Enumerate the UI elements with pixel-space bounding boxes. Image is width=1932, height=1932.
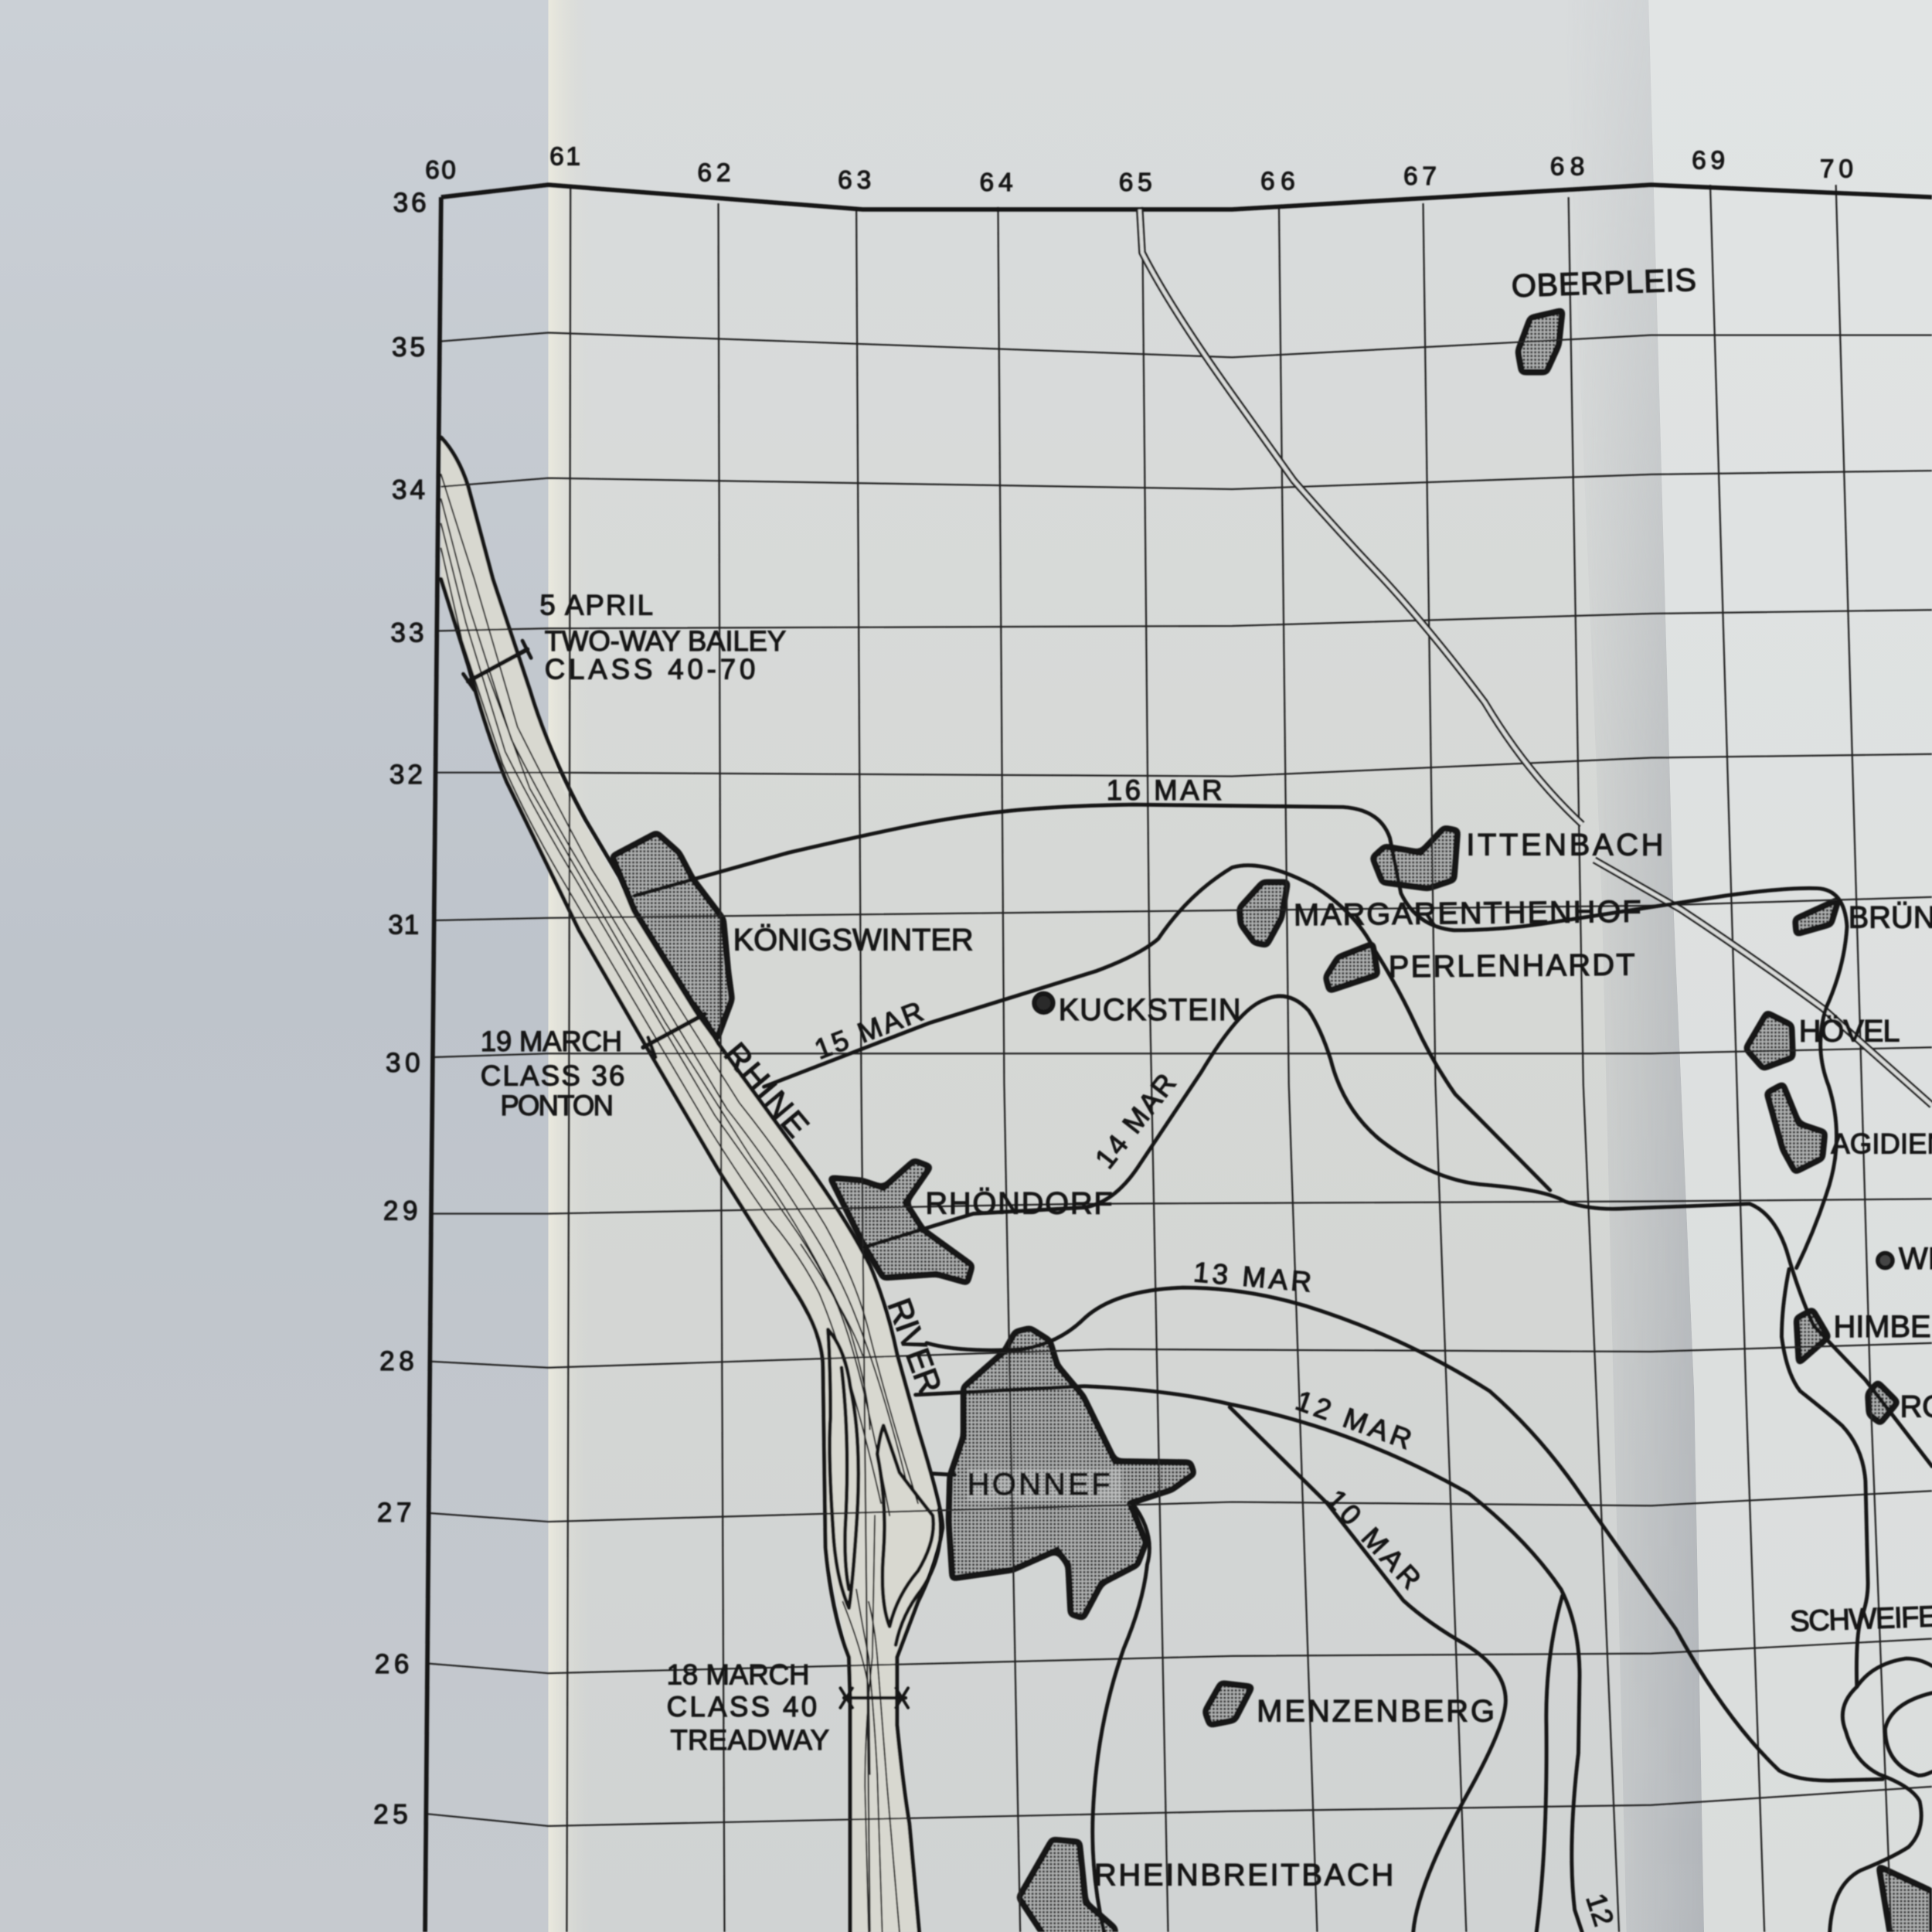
- town: Rheinbreitbach: [1019, 1839, 1115, 1932]
- place names: HONNEF: [968, 1468, 1111, 1502]
- route date labels: 15 MAR: [810, 995, 927, 1066]
- place names: HIMBE: [1833, 1310, 1931, 1344]
- row grid numbers: 32: [389, 760, 423, 790]
- bridge caption: 19 March: [481, 1026, 624, 1121]
- route date labels: [810, 774, 1620, 1930]
- town: Königswinter: [612, 833, 732, 1039]
- map grid: [425, 185, 1932, 1932]
- column grid numbers: 60: [425, 156, 456, 185]
- route: 14 March: [865, 996, 1932, 1466]
- place names: RHEINBREITBACH: [1094, 1858, 1393, 1892]
- bridge: 19 March ponton: [643, 1004, 709, 1057]
- route date labels: 16 MAR: [1107, 774, 1223, 806]
- town: Margarenthenhof: [1240, 883, 1287, 945]
- route: Honnef spur: [933, 1474, 955, 1475]
- river name labels: RIVER: [880, 1294, 948, 1399]
- route date labels: 12: [1580, 1889, 1620, 1930]
- route: 14 March southern branch: [1781, 1269, 1921, 1932]
- town: Rhöndorf: [831, 1161, 972, 1283]
- row grid numbers: 36: [393, 188, 427, 218]
- bridge caption: 18 March: 18 MARCH: [667, 1659, 810, 1691]
- route: 12 March: [916, 1386, 1582, 1932]
- advance routes: [634, 804, 1932, 1932]
- row grid numbers: 28: [379, 1346, 414, 1376]
- column grid numbers: 68: [1550, 152, 1584, 181]
- bridge caption: 18 March: CLASS 40: [667, 1691, 817, 1723]
- town: Ittenbach: [1372, 828, 1458, 889]
- double-line road: [1140, 209, 1932, 1105]
- column grid numbers: 63: [838, 166, 871, 195]
- bridge caption: 19 March: CLASS 36: [481, 1060, 624, 1092]
- town: Oberpleis: [1518, 311, 1563, 372]
- river name labels: [716, 1036, 948, 1399]
- bridge caption: 18 March: TREADWAY: [670, 1724, 829, 1756]
- river body fill: [441, 437, 943, 1932]
- route date labels: 14 MAR: [1089, 1067, 1182, 1175]
- row grid numbers: 27: [377, 1498, 412, 1528]
- bridge caption: 19 March: PONTON: [500, 1090, 614, 1121]
- column grid numbers: [425, 143, 1853, 197]
- column grid numbers: 62: [697, 158, 730, 187]
- town dot: Kuckstein: [1034, 994, 1053, 1012]
- route: 10 March: [1230, 1407, 1505, 1932]
- town: Rostingen: [1868, 1383, 1897, 1423]
- column grid numbers: 61: [549, 143, 580, 172]
- map border: north and west edges: [425, 185, 1932, 1932]
- town: Honnef: [949, 1328, 1194, 1617]
- town: Brüning: [1795, 900, 1838, 934]
- row grid numbers: 31: [388, 910, 419, 940]
- river thin current lines: [441, 474, 918, 1932]
- route: 16 March: [634, 804, 1847, 1268]
- row grid numbers: 35: [392, 332, 425, 362]
- route date labels: 13 MAR: [1192, 1256, 1313, 1298]
- column grid numbers: 69: [1692, 146, 1725, 175]
- bridge caption: 18 March: [667, 1659, 829, 1756]
- town: south-east village: [1879, 1866, 1932, 1932]
- row grid numbers: 33: [390, 618, 423, 648]
- route: 12 March branch: [1536, 1596, 1563, 1932]
- column grid numbers: 65: [1119, 168, 1152, 197]
- bridge caption: 5 April: CLASS 40-70: [545, 654, 755, 685]
- town: Ägidienberg: [1767, 1084, 1825, 1172]
- place names: HÖVEL: [1799, 1014, 1900, 1048]
- town: Menzenberg: [1205, 1683, 1252, 1725]
- route date labels: 12 MAR: [1291, 1384, 1416, 1455]
- column grid numbers: 70: [1820, 155, 1853, 184]
- row grid numbers: 29: [383, 1196, 417, 1226]
- bridge: 18 March treadway: [840, 1688, 908, 1708]
- place names: KÖNIGSWINTER: [733, 923, 974, 957]
- column grid numbers: 64: [980, 168, 1013, 197]
- place names: MENZENBERG: [1257, 1694, 1495, 1728]
- place names: KUCKSTEIN: [1059, 993, 1241, 1027]
- bridge caption: 19 March: 19 MARCH: [481, 1026, 622, 1057]
- row grid numbers: 30: [386, 1048, 420, 1078]
- row grid numbers: 34: [392, 475, 425, 505]
- route: 15 March: [764, 866, 1550, 1190]
- column grid numbers: 67: [1403, 162, 1437, 191]
- place names: RHÖNDORF: [925, 1186, 1113, 1220]
- bridge caption: 5 April: TWO-WAY BAILEY: [545, 625, 786, 657]
- bridge caption: 5 April: [539, 590, 786, 685]
- route: outer loop: [1857, 1658, 1932, 1687]
- row grid numbers: [373, 188, 427, 1830]
- column grid numbers: 66: [1260, 168, 1295, 196]
- row grid numbers: 26: [375, 1649, 409, 1679]
- Honnef label backing strip: [968, 1469, 1121, 1501]
- place names: OBERPLEIS: [1511, 261, 1697, 304]
- Rhine river: [441, 437, 943, 1932]
- route: inner loop: [1885, 1693, 1932, 1776]
- towns: [612, 311, 1932, 1932]
- place names: PERLENHARDT: [1389, 948, 1635, 984]
- river name labels: RHINE: [716, 1036, 816, 1145]
- town: Hövel: [1746, 1013, 1793, 1068]
- town dot: Wi: [1878, 1253, 1893, 1268]
- place names: ITTENBACH: [1466, 828, 1663, 862]
- bridge: 5 April Bailey: [463, 641, 531, 690]
- route: 13 March: [927, 1287, 1883, 1781]
- river islands: [828, 1329, 940, 1645]
- place names: MARGARENTHENHOF: [1294, 895, 1641, 932]
- row grid numbers: 25: [373, 1800, 408, 1830]
- town: Himberg: [1797, 1310, 1828, 1362]
- place names: [733, 261, 1932, 1892]
- town: Perlenhardt: [1326, 944, 1378, 991]
- river banks: [441, 437, 943, 1932]
- route: Honnef south: [1093, 1503, 1149, 1932]
- route date labels: 10 MAR: [1320, 1483, 1427, 1595]
- bridge caption: 5 April: 5 APRIL: [539, 590, 653, 621]
